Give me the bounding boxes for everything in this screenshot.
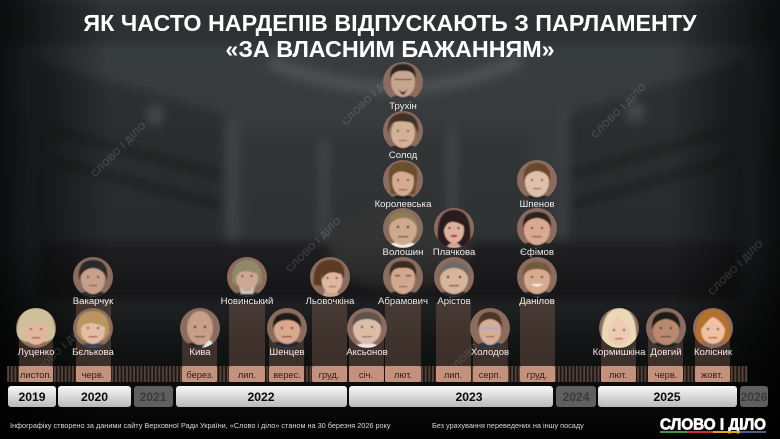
person: Кива: Кива bbox=[189, 347, 211, 358]
person: Королевська bbox=[375, 160, 432, 210]
year timeline: 2024 bbox=[562, 390, 590, 404]
month labels: груд. bbox=[527, 370, 547, 380]
month labels: лип. bbox=[238, 370, 256, 380]
watermarks: СЛОВО І ДІЛО bbox=[30, 320, 90, 380]
person: Холодов: Холодов bbox=[471, 347, 509, 358]
person: Данілов bbox=[517, 257, 557, 307]
watermarks bbox=[30, 68, 766, 380]
month labels: січ. bbox=[359, 370, 373, 380]
year timeline: 2026 bbox=[740, 390, 768, 404]
person: Льовочкіна bbox=[306, 257, 355, 307]
month labels: груд. bbox=[319, 370, 339, 380]
year timeline bbox=[8, 386, 768, 407]
person: Солод: Солод bbox=[389, 150, 418, 161]
year timeline: 2021 bbox=[139, 390, 167, 404]
month labels: черв. bbox=[655, 370, 677, 380]
person: Колісник: Колісник bbox=[694, 347, 733, 358]
person: Бєлькова bbox=[72, 308, 115, 358]
person: Довгий bbox=[646, 308, 686, 358]
person: Плачкова bbox=[433, 208, 476, 258]
person: Аксьонов: Аксьонов bbox=[346, 347, 388, 358]
watermarks: СЛОВО І ДІЛО bbox=[284, 215, 344, 275]
watermarks: СЛОВО І ДІЛО bbox=[89, 120, 149, 180]
person: Трухін bbox=[383, 62, 423, 112]
person: Єфімов bbox=[517, 208, 557, 258]
year timeline: 2025 bbox=[653, 390, 681, 404]
month columns bbox=[19, 300, 730, 366]
person: Вакарчук: Вакарчук bbox=[73, 296, 114, 307]
person: Трухін: Трухін bbox=[389, 101, 417, 112]
watermarks: СЛОВО І ДІЛО bbox=[446, 316, 506, 376]
month labels: лют. bbox=[609, 370, 627, 380]
person: Данілов: Данілов bbox=[519, 296, 555, 307]
person: Луценко bbox=[16, 308, 56, 358]
person: Бєлькова: Бєлькова bbox=[72, 347, 115, 358]
footer scope note: Без урахування переведених на іншу посаду bbox=[432, 421, 584, 430]
person: Довгий: Довгий bbox=[650, 347, 682, 358]
person: Колісник bbox=[693, 308, 733, 358]
month labels: лип. bbox=[444, 370, 462, 380]
person: Кормишкіна: Кормишкіна bbox=[593, 347, 646, 358]
person: Солод bbox=[383, 111, 423, 161]
title bbox=[83, 10, 697, 62]
person: Шпенов: Шпенов bbox=[519, 199, 555, 210]
person: Новинський: Новинський bbox=[221, 296, 273, 307]
person: Абрамович bbox=[378, 257, 428, 307]
month labels: серп. bbox=[479, 370, 501, 380]
month labels: листоп. bbox=[20, 370, 52, 380]
logo: Слово і діло: СЛОВО І ДІЛО bbox=[660, 416, 766, 434]
title: ЯК ЧАСТО НАРДЕПІВ ВІДПУСКАЮТЬ З ПАРЛАМЕНТУ bbox=[83, 10, 697, 36]
person: Луценко: Луценко bbox=[18, 347, 54, 358]
month labels: жовт. bbox=[701, 370, 723, 380]
month labels: берез. bbox=[186, 370, 214, 380]
year timeline: 2022 bbox=[247, 390, 275, 404]
person: Вакарчук bbox=[73, 257, 114, 307]
watermarks: СЛОВО І ДІЛО bbox=[706, 238, 766, 298]
month labels bbox=[19, 366, 730, 382]
person: Кормишкіна bbox=[593, 308, 646, 358]
year timeline: 2019 bbox=[18, 390, 46, 404]
person: Абрамович: Абрамович bbox=[378, 296, 428, 307]
person: Льовочкіна: Льовочкіна bbox=[306, 296, 355, 307]
person: Волошин bbox=[383, 208, 423, 258]
footer source note: Інфографіку створено за даними сайту Верховної Ради України, «Слово і діло» станом на 30 березня 2026 року bbox=[10, 421, 391, 430]
year timeline: 2023 bbox=[455, 390, 483, 404]
watermarks: СЛОВО І ДІЛО bbox=[589, 81, 649, 141]
person: Арістов bbox=[434, 257, 474, 307]
person: Кива bbox=[180, 308, 220, 358]
person: Королевська: Королевська bbox=[375, 199, 432, 210]
person: Волошин: Волошин bbox=[383, 247, 423, 258]
person: Єфімов: Єфімов bbox=[520, 247, 554, 258]
year timeline: 2020 bbox=[81, 390, 108, 404]
month labels: черв. bbox=[82, 370, 104, 380]
person: Арістов: Арістов bbox=[437, 296, 471, 307]
watermarks: СЛОВО І ДІЛО bbox=[340, 68, 400, 128]
month labels: верес. bbox=[273, 370, 301, 380]
month stripe band bbox=[7, 366, 748, 382]
person: Холодов bbox=[470, 308, 510, 358]
person: Аксьонов bbox=[346, 308, 388, 358]
month labels: лют. bbox=[394, 370, 412, 380]
person: Новинський bbox=[221, 257, 273, 307]
person: Шенцев bbox=[267, 308, 307, 358]
person: Плачкова: Плачкова bbox=[433, 247, 476, 258]
person: Шпенов bbox=[517, 160, 557, 210]
title: «ЗА ВЛАСНИМ БАЖАННЯМ» bbox=[225, 36, 555, 62]
person: Шенцев: Шенцев bbox=[269, 347, 305, 358]
